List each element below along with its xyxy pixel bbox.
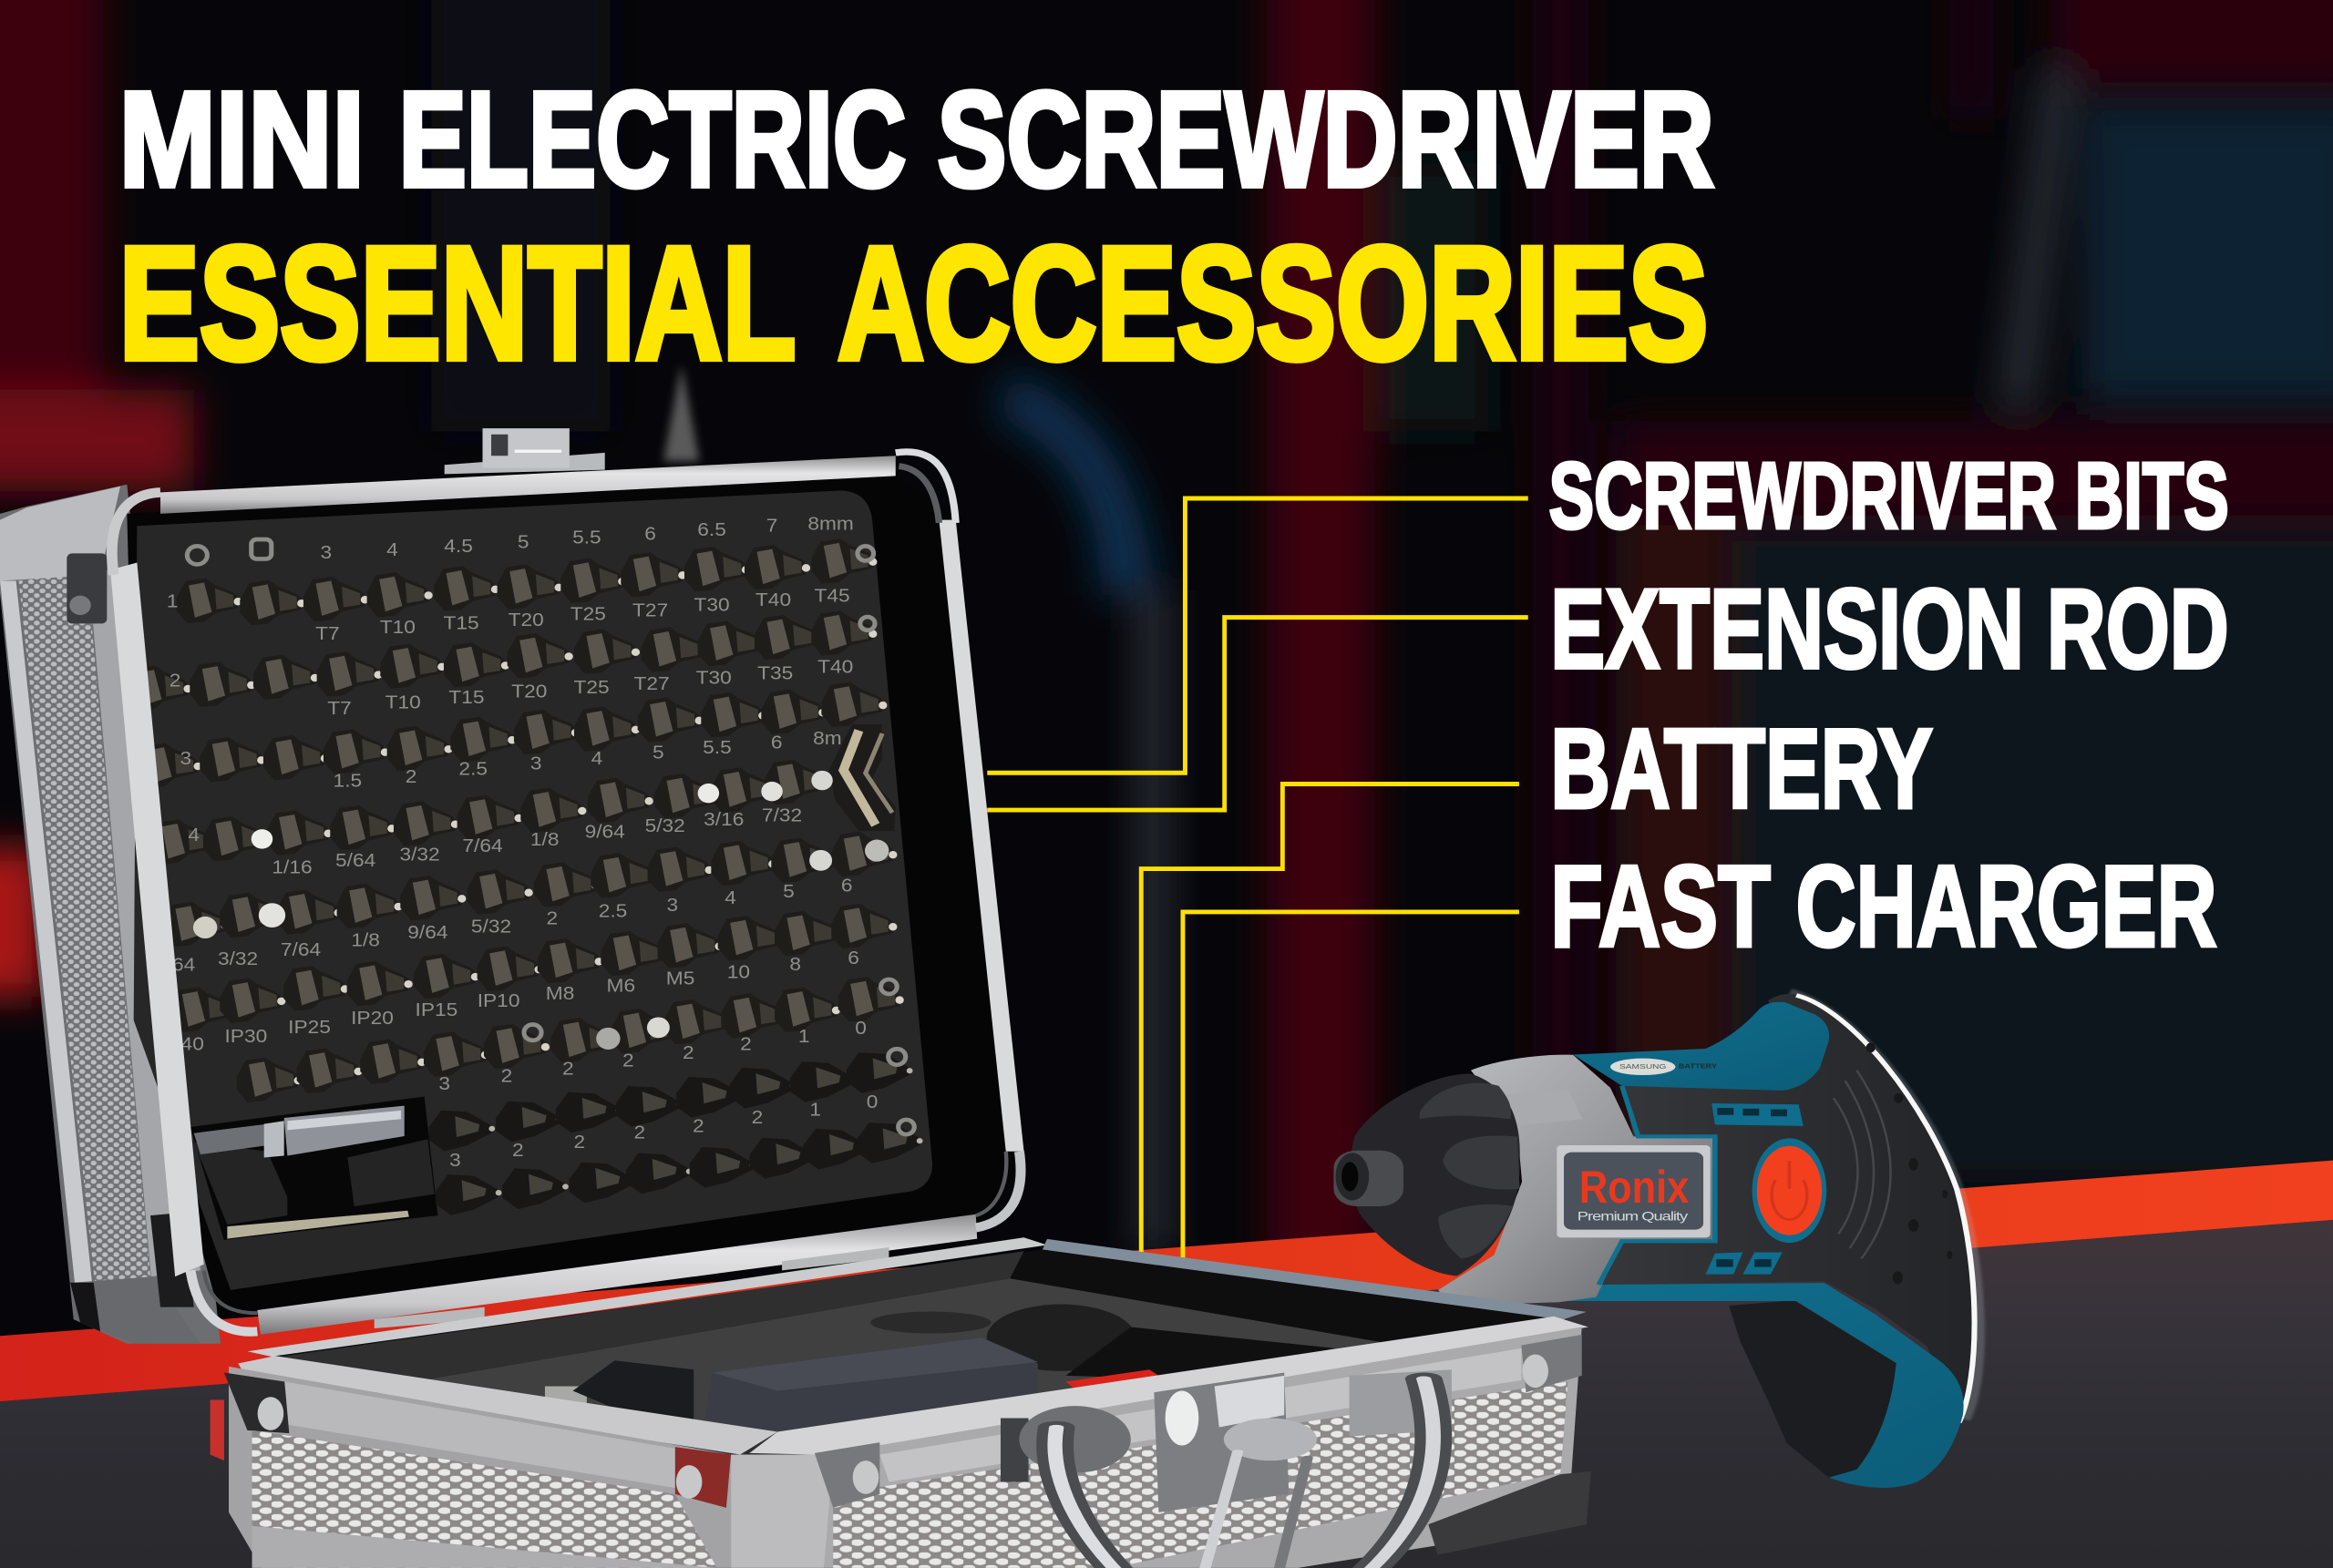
label: fast charger: FAST <box>1550 841 1771 970</box>
foam size labels: T40 <box>817 656 853 677</box>
foam size labels: 0 <box>867 1091 878 1112</box>
foam size labels: T30 <box>694 593 730 615</box>
foam size labels: 6 <box>644 523 656 544</box>
rear rubber body <box>1597 994 1972 1419</box>
bit row 4 <box>149 760 830 865</box>
foam size labels: 3 <box>180 747 191 769</box>
foam size labels: IP15 <box>416 999 457 1020</box>
centre clasp <box>1154 1373 1317 1512</box>
foam size labels: T7 <box>315 622 340 644</box>
foam size labels: 6 <box>771 732 783 753</box>
lower vents <box>1706 1252 1783 1275</box>
foam size labels: T15 <box>443 611 479 633</box>
red tag <box>1065 1369 1164 1392</box>
foam size labels: T27 <box>633 672 670 694</box>
chrome handle <box>1055 1378 1434 1568</box>
battery sticker <box>1610 1059 1718 1075</box>
right rim <box>749 1317 1588 1455</box>
right outer face <box>824 1327 1591 1568</box>
title line 2 <box>119 214 1708 394</box>
foam size labels: 3/32 <box>218 948 258 969</box>
foam size labels: T25 <box>570 602 606 624</box>
front corner <box>675 1442 879 1568</box>
blue lower band <box>1559 1283 1964 1488</box>
foam glyph marks <box>187 539 914 1134</box>
title line 2: ESSENTIAL <box>119 214 796 394</box>
foam size labels: T30 <box>696 667 732 689</box>
label: fast charger <box>1550 841 2217 970</box>
charger body <box>703 1337 1038 1431</box>
foam size labels: 2 <box>406 765 416 787</box>
foam size labels: 7 <box>766 514 777 536</box>
title line 1: SCREWDRIVER <box>938 65 1714 215</box>
open case lid <box>0 428 1024 1344</box>
line to extension rod <box>987 618 1528 810</box>
foam size labels: M8 <box>546 982 574 1004</box>
title line 1 <box>119 65 1714 215</box>
bit row 9 <box>436 1122 923 1215</box>
foam size labels: T45 <box>814 584 850 606</box>
foam insert <box>134 490 932 1290</box>
foam size labels: 6.5 <box>697 518 726 540</box>
extension rod <box>194 1106 405 1157</box>
foam size labels: 4 <box>725 886 736 908</box>
upper vents <box>1711 1103 1804 1126</box>
bit row 2 <box>127 610 877 711</box>
foam size labels: 8m <box>813 727 842 749</box>
foam size labels: T20 <box>509 609 544 630</box>
foam size labels: 2.5 <box>599 900 627 921</box>
foam size labels: 10 <box>727 961 750 982</box>
bit row 6 <box>170 904 897 1032</box>
brand text: Ronix <box>1579 1161 1689 1213</box>
foam size labels: 5 <box>653 741 664 763</box>
foam size labels: 40 <box>181 1033 204 1054</box>
foam size labels: 2 <box>740 1033 752 1054</box>
right corner <box>1521 1335 1582 1392</box>
line to fast charger <box>1183 912 1519 1262</box>
foam size labels: 5/64 <box>335 849 375 871</box>
foam size labels: 7/32 <box>762 804 802 825</box>
foam size labels: 3/32 <box>399 843 440 865</box>
blue top cover <box>1573 1002 1829 1091</box>
foam size labels: 5/32 <box>645 815 685 836</box>
title <box>119 65 1714 394</box>
foam size labels: 2 <box>752 1106 763 1128</box>
foam size labels: 2 <box>693 1114 704 1136</box>
foam size labels: T15 <box>448 686 484 708</box>
rear white edge <box>1796 995 1975 1422</box>
foam size labels: 5 <box>783 880 795 902</box>
blue collar trim <box>1598 1086 1715 1285</box>
title line 1: ELECTRIC <box>399 65 906 215</box>
foam size labels: 0 <box>855 1017 867 1039</box>
foam size labels: 2 <box>170 669 180 691</box>
foam size labels: 3 <box>530 752 541 774</box>
foam size labels: 3 <box>321 541 332 563</box>
foam size labels: 6 <box>841 874 853 896</box>
lid side panel <box>0 485 221 1344</box>
hex key wrench <box>828 724 896 831</box>
foam size labels: 3/16 <box>704 808 744 830</box>
grip ribs <box>1834 1071 1891 1258</box>
rubber nose <box>1351 1074 1520 1276</box>
lid latch <box>445 428 605 474</box>
foam size labels: IP20 <box>351 1007 394 1029</box>
foam size labels: M6 <box>607 974 635 996</box>
left corner <box>211 1373 289 1460</box>
large bit tips near wrench <box>193 771 889 1050</box>
grip dots <box>1866 1042 1953 1284</box>
tagline text: Premium Quality <box>1578 1209 1689 1224</box>
lid hinges <box>375 1247 889 1328</box>
foam size labels: 2 <box>574 1131 585 1153</box>
bit row 5 <box>163 832 897 947</box>
left handle mount <box>1001 1406 1131 1482</box>
screwdriver <box>1333 993 1978 1488</box>
foam size labels: 7/64 <box>462 835 503 856</box>
foam size labels: T7 <box>327 697 352 719</box>
foam size labels: 8mm <box>807 512 854 534</box>
battery sticker: SAMSUNG <box>1619 1062 1666 1071</box>
foam size labels: M5 <box>666 967 694 989</box>
foam size labels: 3 <box>438 1072 450 1094</box>
foam size labels: 2 <box>562 1057 574 1079</box>
foam size labels: 1 <box>809 1098 821 1120</box>
foam size labels: 5.5 <box>572 527 601 548</box>
left outer face <box>229 1367 731 1568</box>
red table edge <box>0 1161 2333 1401</box>
foam size labels: 1 <box>167 589 179 611</box>
foam size labels: 5/32 <box>471 915 511 937</box>
foam size labels: T27 <box>632 599 668 620</box>
foam size labels: 7/64 <box>281 938 321 960</box>
foam size labels: 1 <box>798 1025 810 1047</box>
lid metal frame <box>110 452 1024 1335</box>
line to battery <box>1141 784 1519 1253</box>
nose grooves <box>1420 1083 1520 1258</box>
accessory labels <box>1549 444 2229 970</box>
bit row 3 <box>137 682 887 788</box>
blurred cone on wall <box>663 364 699 461</box>
foam size labels: 3 <box>449 1149 461 1171</box>
foam size labels: IP30 <box>225 1025 267 1047</box>
foam size labels: IP25 <box>288 1016 331 1038</box>
line to screwdriver bits <box>987 498 1528 773</box>
case back rim <box>247 1237 1587 1358</box>
left rim <box>238 1356 777 1455</box>
foam size labels: T40 <box>755 589 791 610</box>
charger plug <box>545 1360 694 1430</box>
foam size labels: IP10 <box>478 989 519 1011</box>
foam size labels: 4.5 <box>444 535 473 557</box>
connector lines <box>987 498 1528 1262</box>
foam size labels: 2.5 <box>458 757 488 779</box>
foam size labels: 1/8 <box>351 929 380 951</box>
foam size labels: 9/64 <box>407 921 447 943</box>
title line 1: MINI <box>119 65 365 215</box>
foam size labels: 4 <box>188 824 200 845</box>
power button <box>1752 1138 1826 1243</box>
foam size labels: T35 <box>757 661 793 683</box>
foam size labels: 5 <box>518 530 529 552</box>
table top <box>0 1220 2333 1568</box>
battery sticker: BATTERY <box>1679 1062 1718 1070</box>
case interior <box>275 1250 1554 1432</box>
lower case with charger <box>211 1237 1591 1568</box>
foam size labels: 2 <box>683 1041 694 1063</box>
bit row 1 <box>177 538 877 625</box>
lid inner recess <box>127 474 1023 1319</box>
interior left wall <box>275 1251 1023 1382</box>
silver collar <box>1438 1055 1715 1306</box>
foam size labels: 2 <box>634 1122 645 1143</box>
foam size labels: T10 <box>385 691 421 712</box>
badge <box>1557 1145 1711 1237</box>
interior foam <box>415 1278 1382 1432</box>
foam size labels: 2 <box>622 1050 634 1071</box>
extension rod slot <box>190 1097 437 1240</box>
bit row 8 <box>429 1052 913 1151</box>
drill pocket <box>870 1305 1335 1378</box>
foam size labels: 5.5 <box>703 736 732 758</box>
title line 2: ACCESSORIES <box>838 214 1708 394</box>
handle <box>1729 1300 1896 1478</box>
foam size labels: 2 <box>546 907 558 928</box>
foam size labels: T20 <box>511 680 547 702</box>
spare clip <box>227 1211 409 1239</box>
foam size labels: 4 <box>386 538 398 560</box>
foam size labels: T10 <box>380 616 416 638</box>
right handle mount <box>1350 1369 1452 1437</box>
foam size labels: 64 <box>172 953 195 975</box>
bit holder tip <box>1333 1151 1403 1206</box>
rim glow <box>1789 993 1978 1419</box>
foam size labels: 2 <box>512 1139 524 1161</box>
foam size labels: 8 <box>789 953 801 975</box>
label: battery: BATTERY <box>1550 707 1933 833</box>
foam size labels: 6 <box>848 947 859 968</box>
foam size labels: T25 <box>573 676 610 698</box>
foam size labels: 9/64 <box>585 820 625 842</box>
foam size labels: 1/16 <box>272 856 313 877</box>
bit row 7 <box>237 977 904 1102</box>
foam size labels <box>167 512 878 1171</box>
foam size labels: 1.5 <box>334 769 362 791</box>
foam size labels: 1/8 <box>530 828 560 850</box>
foam size labels: 3 <box>666 894 678 916</box>
foam size labels: 2 <box>501 1064 512 1086</box>
foam size labels: 4 <box>591 747 602 769</box>
